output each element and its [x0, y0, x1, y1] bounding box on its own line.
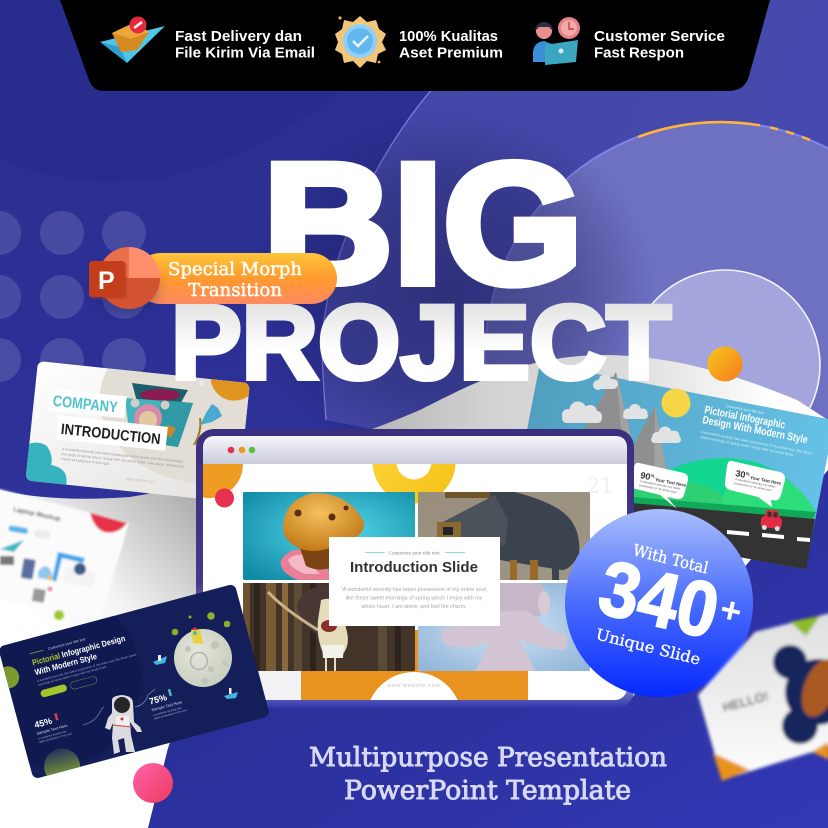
badge: 340+ unique slides: +: [716, 588, 746, 633]
title: BIG PROJECT: [171, 128, 671, 402]
icon: astronaut: [83, 689, 155, 754]
callout: 30 percent: %: [745, 471, 750, 477]
dark slide copy: mornings of spring which I enjoy with my whole heart.: [38, 665, 107, 687]
body text: charm of existence in this spot.: [61, 457, 110, 466]
body text: [59, 447, 185, 487]
text card: introduction slide: Introduction Slide: [350, 559, 478, 576]
dark slide copy: [16, 617, 187, 751]
morph transition badge: [89, 247, 337, 314]
callout: 90 percent: 90: [640, 470, 651, 482]
pink ball: [133, 763, 173, 803]
photo: robot bull: [418, 492, 590, 580]
slide card: hello (blurred): HELLO!: [721, 688, 770, 715]
photo: muffin: [243, 492, 415, 580]
dark slide copy: Sample Text Here: [36, 723, 69, 736]
orange ball: [708, 346, 742, 382]
dark slide copy: Pictorial Infographic Design: [31, 633, 126, 668]
text: delivery: [175, 28, 315, 62]
pill: [135, 253, 337, 304]
callout: 30 percent: A wonderful serenity has taken: [735, 477, 776, 489]
text card: introduction slide: [329, 537, 500, 626]
slide card: pictorial infographic road: [511, 363, 828, 569]
text: delivery: File Kirim Via Email: [175, 44, 315, 62]
text: service: Customer Service: [594, 28, 725, 45]
icon: quality badge: [335, 16, 386, 68]
icon: car: [760, 509, 783, 531]
text: service: Fast Respon: [594, 44, 684, 62]
dark slide copy: 75%: [148, 692, 168, 707]
callout: 30 percent: 30: [735, 468, 746, 480]
callout: 90 percent: A wonderful serenity has taken: [640, 479, 681, 491]
pill: Transition: [188, 281, 282, 301]
slide card: company introduction: [26, 362, 250, 498]
slide card: laptop mockup (blurred): Laptop Mockup: [13, 506, 61, 523]
icon: treasure chest: [125, 383, 222, 447]
slide title: sweet mornings of spring which I enjoy with my whole heart.: [700, 435, 794, 457]
slide decoration: www.website.com: [386, 683, 441, 689]
pill: Special Morph: [168, 260, 302, 280]
top service bar: [60, 0, 770, 91]
slide title: [700, 404, 812, 457]
photo: mushroom character: [243, 583, 415, 671]
badge: 340+ unique slides: 340: [591, 543, 727, 655]
clouds: [562, 374, 681, 443]
slide card: hello (blurred): [698, 612, 828, 781]
slide card: pictorial dark space: [0, 584, 269, 778]
slide title: Customize your title text: [726, 404, 764, 415]
callout: 30 percent: [725, 461, 785, 507]
introduction label: INTRODUCTION: [60, 421, 161, 448]
callout: 90 percent: [632, 463, 688, 509]
dark slide copy: A wonderful serenity has taken possession of my entire soul, like these sweet: [37, 653, 137, 683]
body text: A wonderful serenity has taken possession of my entire soul like these sweet: [62, 447, 183, 464]
badge: 340+ unique slides: Unique Slide: [594, 625, 702, 669]
landscape illustration: [562, 372, 816, 570]
red dot: [215, 488, 234, 508]
callout: 90 percent: Your Text Here: [654, 477, 687, 488]
dark slide copy: Customize your title text: [48, 637, 86, 651]
callout: 30 percent: Your Text Here: [749, 475, 782, 486]
text: service: [594, 28, 725, 62]
text: quality: Aset Premium: [399, 44, 503, 62]
text: delivery: Fast Delivery dan: [175, 28, 302, 45]
icon: email paper plane: [100, 16, 165, 63]
callout: 30 percent: possession of my entire soul: [734, 481, 772, 492]
icon: PowerPoint logo: P: [98, 267, 115, 295]
window title bar: [203, 436, 627, 464]
callout: 90 percent: possession of my entire soul: [639, 483, 677, 494]
browser window mockup: [196, 429, 634, 708]
footer title: [309, 743, 667, 806]
title: BIG PROJECT: BIG: [263, 128, 583, 320]
callout: 90 percent: %: [650, 473, 655, 479]
dark slide copy: Sample Text Here: [151, 699, 184, 712]
badge: 340+ unique slides: With Total: [631, 540, 710, 578]
body text: www.website.com: [126, 477, 155, 484]
text card: introduction slide: Customize your title text: [388, 550, 440, 556]
slide decoration: [203, 436, 610, 700]
footer title: Multipurpose Presentation: [309, 743, 667, 773]
company label: COMPANY: [52, 393, 119, 417]
icon: customer service agent: [533, 17, 580, 65]
title: BIG PROJECT: PROJECT: [171, 284, 671, 402]
icon: PowerPoint logo: [89, 247, 160, 314]
body text: mornings of spring which I enjoy with my whole heart. I am alone, and feel the: [61, 452, 185, 469]
slide title: Pictorial Infographic: [703, 404, 786, 432]
dark slide copy: A wonderful serenity has: [152, 706, 182, 717]
text card: introduction slide: whole heart. I am alone, and feel the charm.: [360, 604, 467, 610]
dark slide copy: A wonderful serenity has: [38, 729, 68, 741]
text: quality: [399, 28, 503, 62]
dark slide copy: taken possession of my soul: [39, 731, 73, 744]
badge: 340+ unique slides: [565, 509, 753, 697]
slide decoration: 21: [587, 474, 613, 498]
slide title: A wonderful serenity has taken possession of my entire soul, like these: [701, 430, 812, 455]
icon: planets and moon: [153, 612, 238, 699]
text card: introduction slide: like these sweet mornings of spring which I enjoy with my: [346, 596, 483, 602]
photo: plush astronaut: [418, 583, 590, 671]
dark slide copy: With Modern Style: [34, 651, 98, 677]
dark slide copy: 45%: [33, 716, 53, 730]
text card: introduction slide: "A wonderful serenity has taken possession of my entire soul,: [341, 587, 488, 593]
dark slide copy: taken possession of my soul: [153, 708, 187, 721]
slide card: laptop mockup (blurred): [0, 488, 129, 622]
text: quality: 100% Kualitas: [399, 28, 498, 45]
footer title: PowerPoint Template: [344, 776, 631, 806]
